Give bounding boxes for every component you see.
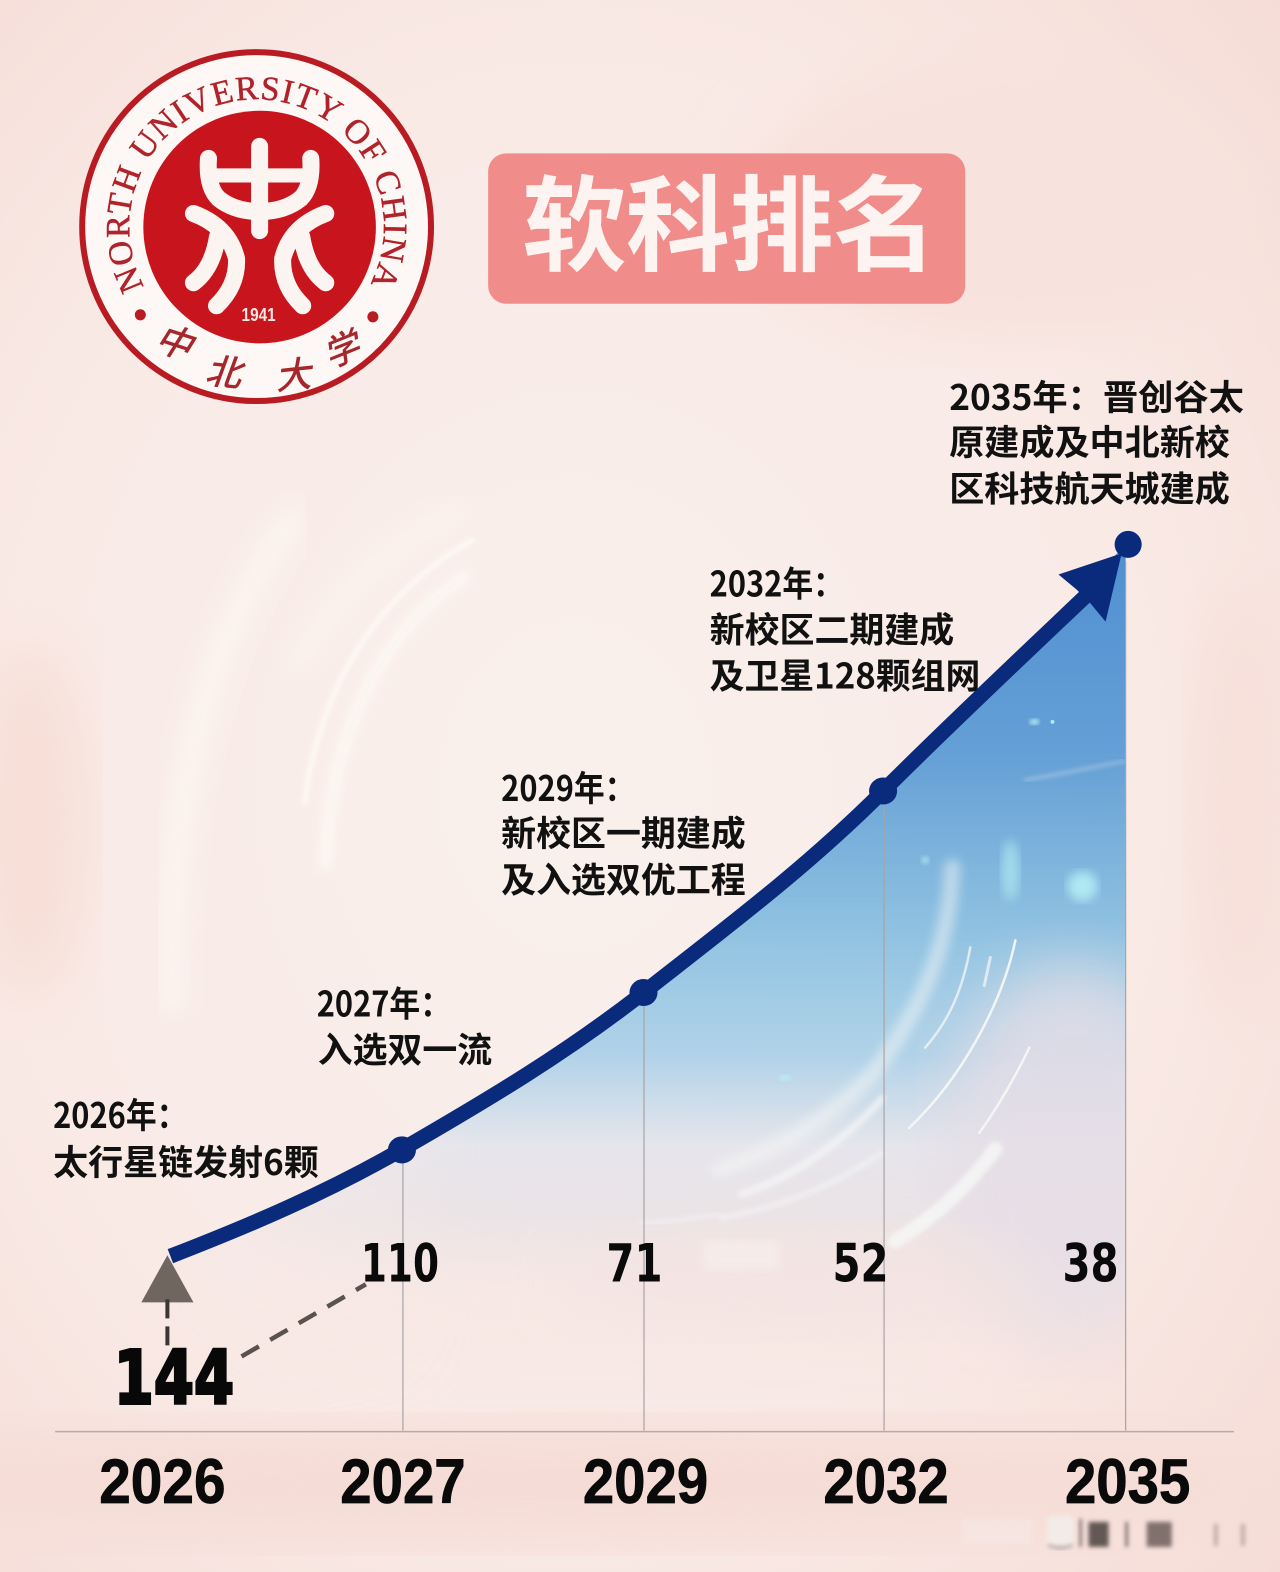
year axis labels <box>99 1447 1190 1517</box>
logo Chinese name: 学 <box>317 323 369 376</box>
milestone 2032: 2032年： <box>710 557 844 608</box>
year axis labels: 2029 <box>583 1447 708 1517</box>
rank numbers: 38 <box>1062 1234 1119 1294</box>
chart area fill <box>294 552 1126 1254</box>
logo glyph <box>193 146 326 306</box>
milestone 2029: 新校区一期建成 <box>501 806 746 857</box>
milestone 2035 <box>949 370 1244 512</box>
logo year: 1941 <box>242 305 276 325</box>
logo Chinese name: 大 <box>273 353 317 398</box>
milestone 2027 <box>317 977 492 1074</box>
milestone 2026: 2026年： <box>53 1088 187 1139</box>
milestone 2026 <box>53 1088 319 1186</box>
milestone 2035: 区科技航天城建成 <box>949 461 1230 512</box>
milestone 2029: 及入选双优工程 <box>501 852 746 903</box>
start arrow and dashed connectors <box>141 1255 366 1356</box>
year axis labels: 2027 <box>340 1447 466 1517</box>
rank numbers: 71 <box>606 1234 663 1294</box>
milestone 2032: 新校区二期建成 <box>710 603 954 654</box>
logo ring text: NORTH UNIVERSITY OF CHINA <box>106 77 407 295</box>
axis and drop lines <box>55 561 1234 1432</box>
rank numbers <box>114 1234 1119 1422</box>
milestone 2032: 及卫星128颗组网 <box>710 649 980 700</box>
logo Chinese name <box>150 317 369 398</box>
milestone 2035: 原建成及中北新校 <box>949 415 1230 466</box>
milestone 2035: 2035年：晋创谷太 <box>949 370 1244 421</box>
year axis labels: 2032 <box>823 1447 949 1517</box>
milestone 2029 <box>501 761 746 903</box>
year axis labels: 2035 <box>1065 1447 1190 1517</box>
milestone 2029: 2029年： <box>501 761 635 812</box>
logo: North University of China seal <box>79 49 434 404</box>
milestone 2032 <box>710 557 980 700</box>
logo Chinese name: 中 <box>150 317 200 368</box>
logo Chinese name: 北 <box>203 350 247 395</box>
trend curve with arrowhead <box>170 531 1142 1256</box>
year axis labels: 2026 <box>99 1447 226 1517</box>
milestone 2027: 入选双一流 <box>318 1023 492 1074</box>
milestone 2026: 太行星链发射6颗 <box>53 1135 319 1186</box>
title badge: 软科排名 <box>522 143 937 294</box>
chart <box>55 531 1234 1517</box>
milestone 2027: 2027年： <box>317 977 451 1028</box>
rank numbers: 144 <box>114 1336 234 1422</box>
rank numbers: 110 <box>361 1234 439 1294</box>
blurred watermark strip <box>962 1516 1245 1547</box>
rank numbers: 52 <box>832 1234 889 1294</box>
